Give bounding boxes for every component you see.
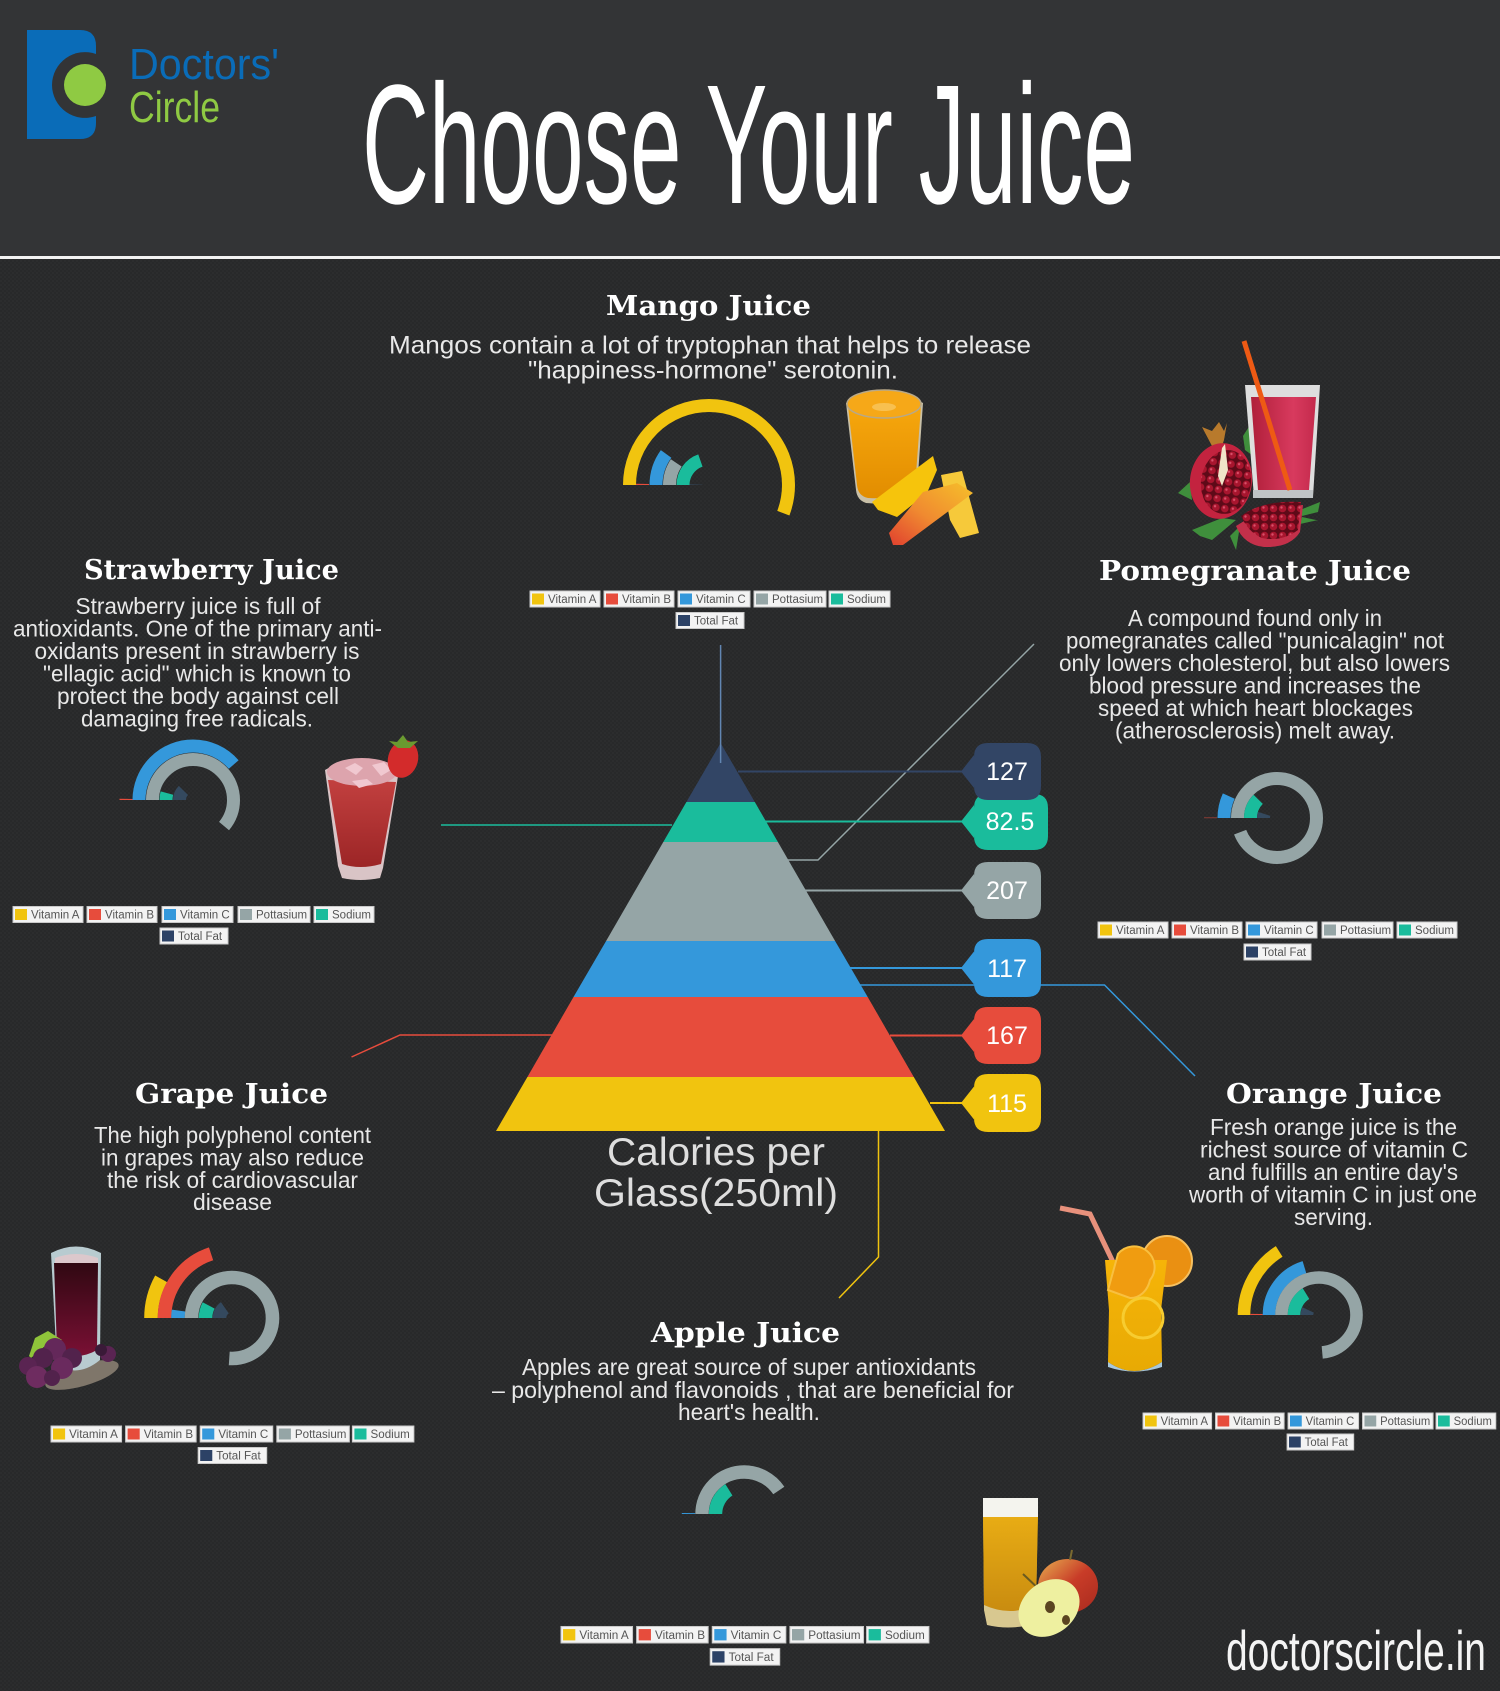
badge: 115: 115	[987, 1090, 1027, 1118]
pyramid caption: Glass(250ml)	[594, 1172, 838, 1215]
legend: strawberry	[13, 906, 374, 944]
radial chart: grape	[151, 1237, 313, 1399]
text: strawberry: "ellagic acid" which is known to	[43, 660, 351, 686]
text: strawberry: Strawberry juice is full of	[76, 593, 321, 619]
legend: apple	[561, 1626, 929, 1665]
text: mango: Mangos contain a lot of tryptophan that helps to release	[389, 332, 1031, 360]
illustration: orange juice	[1060, 1208, 1192, 1372]
legend: pomegranate: Vitamin A	[1116, 925, 1165, 937]
legend: grape: Pottasium	[295, 1429, 346, 1441]
badge: 82.5	[961, 794, 1048, 850]
connector: orange	[860, 985, 1195, 1076]
text: grape: The high polyphenol content	[94, 1122, 372, 1148]
text: pomegranate: pomegranates called "punicalagin" not	[1066, 628, 1445, 654]
badge connector lines	[738, 772, 962, 1103]
text: apple: heart's health.	[678, 1399, 820, 1425]
text: grape: in grapes may also reduce	[101, 1144, 364, 1170]
text: pomegranate: only lowers cholesterol, but also lowers	[1059, 650, 1450, 676]
legend: apple: Vitamin B	[655, 1629, 705, 1642]
panel: mango juice	[389, 291, 1031, 628]
panel: apple juice	[492, 1318, 1098, 1665]
panel: pomegranate juice	[1059, 341, 1457, 960]
logo: Doctors' Circle: Doctors'	[129, 40, 279, 89]
pyramid chart: calories per glass	[496, 743, 945, 1131]
text: strawberry: antioxidants. One of the primary anti-	[13, 616, 382, 642]
legend: mango: Vitamin C	[696, 594, 746, 606]
legend: strawberry: Vitamin B	[105, 910, 154, 922]
connector: mango	[720, 645, 722, 763]
legend: pomegranate	[1098, 922, 1457, 960]
legend: strawberry: Vitamin A	[31, 910, 80, 922]
badge: 115	[961, 1074, 1041, 1132]
radial chart: apple	[688, 1458, 800, 1570]
illustration: pomegranate juice	[1178, 341, 1320, 550]
legend: pomegranate: Vitamin B	[1190, 925, 1239, 937]
text: strawberry: damaging free radicals.	[81, 706, 313, 732]
radial chart: strawberry	[126, 733, 260, 867]
legend: apple: Total Fat	[729, 1651, 774, 1664]
heading: strawberry: Strawberry Juice	[84, 555, 339, 586]
text: mango: "happiness-hormone" serotonin.	[528, 356, 898, 384]
text: pomegranate: (atherosclerosis) melt away.	[1115, 718, 1395, 744]
legend: orange: Sodium	[1454, 1416, 1492, 1428]
text: orange: and fulfills an entire day's	[1208, 1159, 1458, 1185]
connector: apple	[839, 1131, 878, 1298]
text: pomegranate: speed at which heart blockages	[1098, 695, 1413, 721]
badge: 82.5: 82.5	[986, 808, 1034, 836]
radial chart: mango	[630, 406, 788, 564]
legend: orange	[1143, 1413, 1496, 1450]
legend: orange: Total Fat	[1305, 1437, 1349, 1449]
text: pomegranate: blood pressure and increases the	[1089, 672, 1421, 698]
legend: strawberry: Total Fat	[178, 931, 223, 943]
panel: grape juice	[19, 1079, 414, 1464]
badge: 207: 207	[986, 877, 1028, 905]
text: grape: the risk of cardiovascular	[107, 1167, 358, 1193]
logo: Doctors' Circle: Circle	[129, 83, 220, 132]
legend: grape: Vitamin B	[144, 1429, 193, 1441]
text: pomegranate	[1059, 605, 1450, 744]
legend: grape: Vitamin C	[218, 1429, 268, 1441]
badge: 127: 127	[986, 758, 1028, 786]
legend: mango: Vitamin A	[548, 594, 597, 606]
badge: 167: 167	[986, 1022, 1028, 1050]
text: orange: serving.	[1294, 1204, 1373, 1230]
legend: pomegranate: Vitamin C	[1264, 925, 1314, 937]
panel: strawberry juice	[13, 555, 422, 944]
heading: mango: Mango Juice	[606, 291, 811, 322]
illustration: apple juice	[983, 1498, 1098, 1649]
heading: grape: Grape Juice	[135, 1079, 328, 1110]
legend: apple: Sodium	[885, 1629, 925, 1642]
connector: pomegranate	[786, 644, 1034, 860]
legend: strawberry: Sodium	[332, 910, 371, 922]
text: orange: worth of vitamin C in just one	[1188, 1182, 1477, 1208]
text: grape	[94, 1122, 372, 1215]
legend: mango: Pottasium	[772, 594, 823, 606]
legend: pomegranate: Total Fat	[1262, 947, 1307, 959]
badge: 207	[961, 862, 1041, 919]
heading: orange: Orange Juice	[1226, 1079, 1442, 1110]
pyramid caption: Calories per	[607, 1131, 825, 1174]
legend: mango: Vitamin B	[622, 594, 671, 606]
legend: mango: Total Fat	[694, 616, 739, 628]
legend: apple: Vitamin A	[579, 1629, 629, 1642]
badge: 167	[961, 1007, 1041, 1064]
header background	[0, 0, 1500, 257]
legend: grape: Total Fat	[216, 1451, 262, 1462]
legend: strawberry: Vitamin C	[180, 910, 230, 922]
legend: apple: Pottasium	[808, 1629, 861, 1642]
text: apple: Apples are great source of super antioxidants	[522, 1354, 976, 1380]
text: apple	[492, 1354, 1014, 1425]
badge: 117	[961, 939, 1041, 997]
text: orange: richest source of vitamin C	[1200, 1136, 1468, 1162]
illustration: strawberry juice	[325, 735, 422, 880]
legend: mango	[530, 591, 890, 628]
text: orange: Fresh orange juice is the	[1210, 1114, 1457, 1140]
text: apple: – polyphenol and flavonoids , that are beneficial for	[492, 1377, 1014, 1403]
legend: pomegranate: Sodium	[1415, 925, 1454, 937]
connector: strawberry	[441, 824, 672, 826]
radial chart: pomegranate	[1210, 752, 1344, 884]
illustration: mango juice	[846, 390, 979, 545]
legend: pomegranate: Pottasium	[1340, 925, 1391, 937]
legend: mango: Sodium	[847, 594, 886, 606]
illustration: grape juice	[19, 1246, 122, 1396]
text: mango	[389, 332, 1031, 384]
heading: apple: Apple Juice	[650, 1318, 840, 1349]
panel: orange juice	[1060, 1079, 1496, 1450]
legend: apple: Vitamin C	[731, 1629, 782, 1642]
pyramid caption	[594, 1131, 838, 1215]
logo: Doctors' Circle	[27, 30, 279, 139]
legend: orange: Vitamin B	[1233, 1416, 1281, 1428]
legend: orange: Vitamin A	[1161, 1416, 1208, 1428]
legend: orange: Pottasium	[1380, 1416, 1430, 1428]
legend: grape: Sodium	[371, 1429, 410, 1441]
heading: pomegranate: Pomegranate Juice	[1099, 556, 1411, 587]
text: strawberry: protect the body against cell	[57, 683, 339, 709]
text: pomegranate: A compound found only in	[1128, 605, 1382, 631]
text: orange	[1188, 1114, 1477, 1230]
radial chart: orange	[1244, 1240, 1394, 1390]
legend: orange: Vitamin C	[1306, 1416, 1354, 1428]
text: grape: disease	[193, 1189, 272, 1215]
badge: 117: 117	[987, 955, 1027, 983]
badge: 127	[961, 743, 1041, 800]
legend: grape	[51, 1426, 414, 1464]
legend: grape: Vitamin A	[69, 1429, 118, 1441]
legend: strawberry: Pottasium	[256, 910, 307, 922]
text: strawberry	[13, 593, 382, 732]
connector: grape	[352, 1035, 552, 1057]
text: strawberry: oxidants present in strawberry is	[34, 638, 360, 664]
